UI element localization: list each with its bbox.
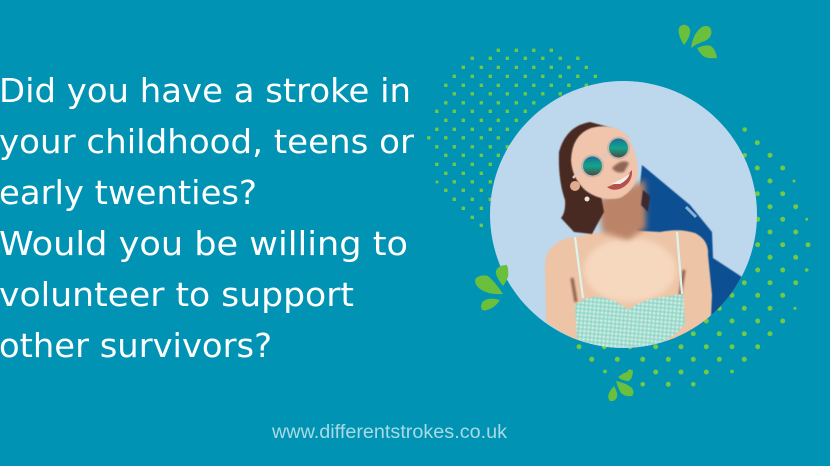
wall [490,81,757,348]
leaves: top right [679,25,717,58]
leaves: left of photo [475,265,508,310]
line 3: early twenties? [0,173,257,212]
line 1: Did you have a stroke in [0,71,411,110]
website url: www.differentstrokes.co.uk [271,422,508,443]
line 4: Would you be willing to [0,224,408,263]
neck [598,180,646,240]
headline text [0,71,414,365]
dot pattern: upper left [428,49,597,227]
leaves: bottom [608,370,634,401]
bikini straps [575,232,682,298]
line 5: volunteer to support [0,275,354,314]
dot pattern: lower right [577,128,810,386]
cast shadow [636,165,742,345]
underarm shadows [572,270,684,302]
photo: smiling woman in sunglasses against pale blue wall [490,81,757,348]
line 6: other survivors? [0,326,272,365]
gingham bikini top [575,294,685,347]
sunglasses [573,135,630,178]
chest highlight [584,238,676,302]
arms and shoulders [545,230,712,340]
nose and smile [607,161,632,190]
face [571,126,638,199]
ear and earring [570,181,580,191]
hair [559,122,612,234]
line 2: your childhood, teens or [0,122,414,161]
